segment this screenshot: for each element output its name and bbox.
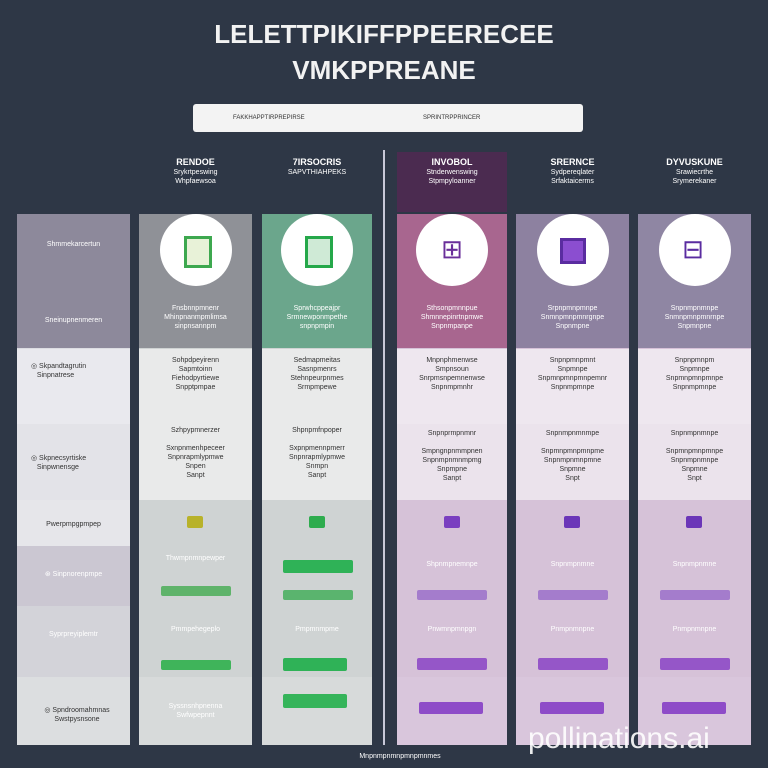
column headers: Whpfaewsoa bbox=[175, 178, 216, 185]
column 5: Snpnpmnpm bbox=[675, 357, 714, 364]
column headers: Srymerekaner bbox=[673, 178, 716, 185]
column 3: Shpnmpnemnpe bbox=[426, 561, 478, 568]
column 2: Pmpmnmpme bbox=[295, 626, 339, 633]
column 1: Syssnsnhpnenna bbox=[169, 703, 222, 710]
column 2: Sanpt bbox=[308, 472, 326, 479]
column 4: Pnmpnmnpne bbox=[551, 626, 594, 633]
column 1: Sohpdpeyirenn bbox=[172, 357, 219, 364]
column 4: Snpmnpmnpmnpme bbox=[541, 448, 604, 455]
column headers bbox=[174, 152, 723, 212]
column 4: Snpnmpnmnpmne bbox=[544, 457, 601, 464]
column 3: Snpnmpnmnmpmg bbox=[422, 457, 482, 464]
column 3: Snpmpne bbox=[437, 466, 467, 473]
column headers: Srfaktaicerms bbox=[551, 178, 594, 185]
column 5 bbox=[638, 214, 751, 745]
column 1: Pmmpehegeplo bbox=[171, 626, 220, 633]
column 5: Pnmpnmnpne bbox=[673, 626, 716, 633]
column 5: Snpnmpnmnpe bbox=[671, 305, 718, 312]
column headers: DYVUSKUNE bbox=[666, 157, 723, 167]
search bar bbox=[193, 104, 583, 132]
column 5: Snpnmpnmnpe bbox=[671, 430, 718, 437]
divider bbox=[383, 150, 385, 745]
column 0: labels: Shmmekarcertun bbox=[47, 241, 100, 248]
column 4: Snpnpmnpmnt bbox=[550, 357, 595, 364]
column 1 bbox=[139, 214, 252, 745]
column 3: Smpngnpnmmpnen bbox=[421, 448, 483, 455]
column 3: Shmnnepinrtnpmwe bbox=[421, 314, 483, 321]
column 5: Snpmnpmnpmnpe bbox=[666, 448, 723, 455]
column 0: labels: Syprpreyiplemtr bbox=[49, 631, 98, 638]
column 2: Sasnpmenrs bbox=[297, 366, 337, 373]
column 2 bbox=[262, 214, 372, 745]
column 5: Snmnpmnpmnrnpe bbox=[665, 314, 724, 321]
column 1: Snpen bbox=[185, 463, 206, 470]
column headers: Srykrtpeswing bbox=[174, 169, 217, 176]
column 4 bbox=[516, 214, 629, 745]
column 3: Snpnmpanpe bbox=[431, 323, 473, 330]
column 5: Snpmnpmnpmnpe bbox=[666, 375, 723, 382]
column 2: Sxpnpmennpmerr bbox=[289, 445, 345, 452]
column 3 bbox=[397, 214, 507, 745]
column 3: Snrpmsnpemnenwse bbox=[419, 375, 485, 382]
column 4: Snpnmpne bbox=[556, 323, 589, 330]
column 5: Snpnmpnmne bbox=[673, 561, 716, 568]
column 2: Snpnrapmlypmwe bbox=[289, 454, 345, 461]
search bar: FAKKHAPPTIRPREPIRSE bbox=[233, 115, 305, 121]
title bbox=[214, 19, 554, 85]
column 4: Snpnmpnmnmpe bbox=[546, 430, 599, 437]
column headers: SAPVTHIAHPEKS bbox=[288, 169, 346, 176]
column 3: Sanpt bbox=[443, 475, 461, 482]
column 1: Snpptpmpae bbox=[176, 384, 215, 391]
watermark: pollinations.ai bbox=[528, 722, 710, 755]
column 3: ⊞ bbox=[441, 234, 463, 264]
title: VMKPPREANE bbox=[292, 55, 476, 85]
column 4: Snpmnpmnpmnpemnr bbox=[538, 375, 607, 382]
column 3: Pnwmnpmnpgn bbox=[428, 626, 476, 633]
column 1: Snpnrapmlypmwe bbox=[167, 454, 224, 461]
column 3: Snpnmpmnhr bbox=[431, 384, 473, 391]
column 5: Snpmnpne bbox=[678, 323, 711, 330]
column 5: Snpt bbox=[687, 475, 702, 482]
column 2: snpnpmpin bbox=[300, 323, 334, 330]
column 5: ⊟ bbox=[682, 234, 704, 264]
column headers: Stpmpyloanner bbox=[428, 178, 476, 185]
column 1: Szhpypmnerzer bbox=[171, 427, 220, 434]
column 0: labels bbox=[17, 214, 130, 745]
column headers: INVOBOL bbox=[431, 157, 472, 167]
column 0: labels: Pwerpmpgpmpep bbox=[46, 521, 101, 528]
column headers: Srawiecrthe bbox=[676, 169, 713, 176]
column 1: Sxnpnmenhpeceer bbox=[166, 445, 225, 452]
column 4: Snpnmpnmne bbox=[551, 561, 594, 568]
column 3: Mnpnphmenwse bbox=[426, 357, 478, 364]
column 3: Smpnsoun bbox=[435, 366, 469, 373]
column 5: Snpmne bbox=[681, 466, 708, 473]
title: LELETTPIKIFFPPEERECEE bbox=[214, 19, 554, 49]
column 2: Stehnpeurpnmes bbox=[290, 375, 344, 382]
column 4: Snmnpmnpmnrgnpe bbox=[541, 314, 604, 321]
column 4: Snpnmpmnpe bbox=[551, 384, 594, 391]
column 5: Snpnmpnmnpe bbox=[671, 457, 718, 464]
column headers: SRERNCE bbox=[550, 157, 594, 167]
footer text: Mnpnmpnmnpmnpmnmes bbox=[359, 753, 441, 760]
column 0: labels: ◎ Skpnecsyrtiske bbox=[31, 455, 86, 462]
column 1: Swfwpepnnt bbox=[176, 712, 215, 719]
column 0: labels: Sinpwnensge bbox=[37, 464, 79, 471]
column 1: Mhinpnanmpmlimsa bbox=[164, 314, 227, 321]
column 5: Snpmnpe bbox=[680, 366, 709, 373]
column 0: labels: Sinpnatrese bbox=[37, 372, 74, 379]
column 0: labels: Sneinupnenmeren bbox=[45, 317, 102, 324]
column 2: Srmnewponmpethe bbox=[287, 314, 347, 321]
column headers: Stnderwenswing bbox=[426, 169, 478, 176]
column headers: RENDOE bbox=[176, 157, 215, 167]
column 3: Snpnprmpnmnr bbox=[428, 430, 476, 437]
column 4: Srpnpmnpmnpe bbox=[548, 305, 597, 312]
column 1: Sapmtoinn bbox=[179, 366, 212, 373]
column 2: Shpnpmfnpoper bbox=[292, 427, 342, 434]
column 5: Snpnmpmnpe bbox=[673, 384, 716, 391]
column 3: Sthsonpmnnpue bbox=[426, 305, 477, 312]
column 1: Sanpt bbox=[186, 472, 205, 479]
column headers: 7IRSOCRIS bbox=[293, 157, 341, 167]
column 1: Fnsbnnpmnenr bbox=[172, 305, 219, 312]
search bar: SPRINTRPPRINCER bbox=[423, 115, 480, 121]
column 0: labels: Swstpysnsone bbox=[54, 716, 100, 723]
column 0: labels: ◎ Spndroomahmnas bbox=[44, 707, 110, 714]
column 4: Snpt bbox=[565, 475, 580, 482]
column 2: Sedmapmeitas bbox=[294, 357, 340, 364]
column 4: Snpmne bbox=[559, 466, 586, 473]
column 0: labels: ⊛ Sinpnorenpmpe bbox=[45, 571, 102, 578]
column 1: sinpnsannpm bbox=[175, 323, 216, 330]
column 0: labels: ◎ Skpandtagrutin bbox=[31, 363, 86, 370]
column 4: Snpmnpe bbox=[558, 366, 587, 373]
column headers: Sydpereqlater bbox=[551, 169, 594, 176]
column 2: Snmpn bbox=[306, 463, 328, 470]
column 1: Fiehodpyrtiewe bbox=[172, 375, 219, 382]
column 2: Srmpmpewe bbox=[297, 384, 337, 391]
column 1: Thwmpnmnpewper bbox=[166, 555, 225, 562]
column 2: Sprwhcppeajpr bbox=[294, 305, 340, 312]
